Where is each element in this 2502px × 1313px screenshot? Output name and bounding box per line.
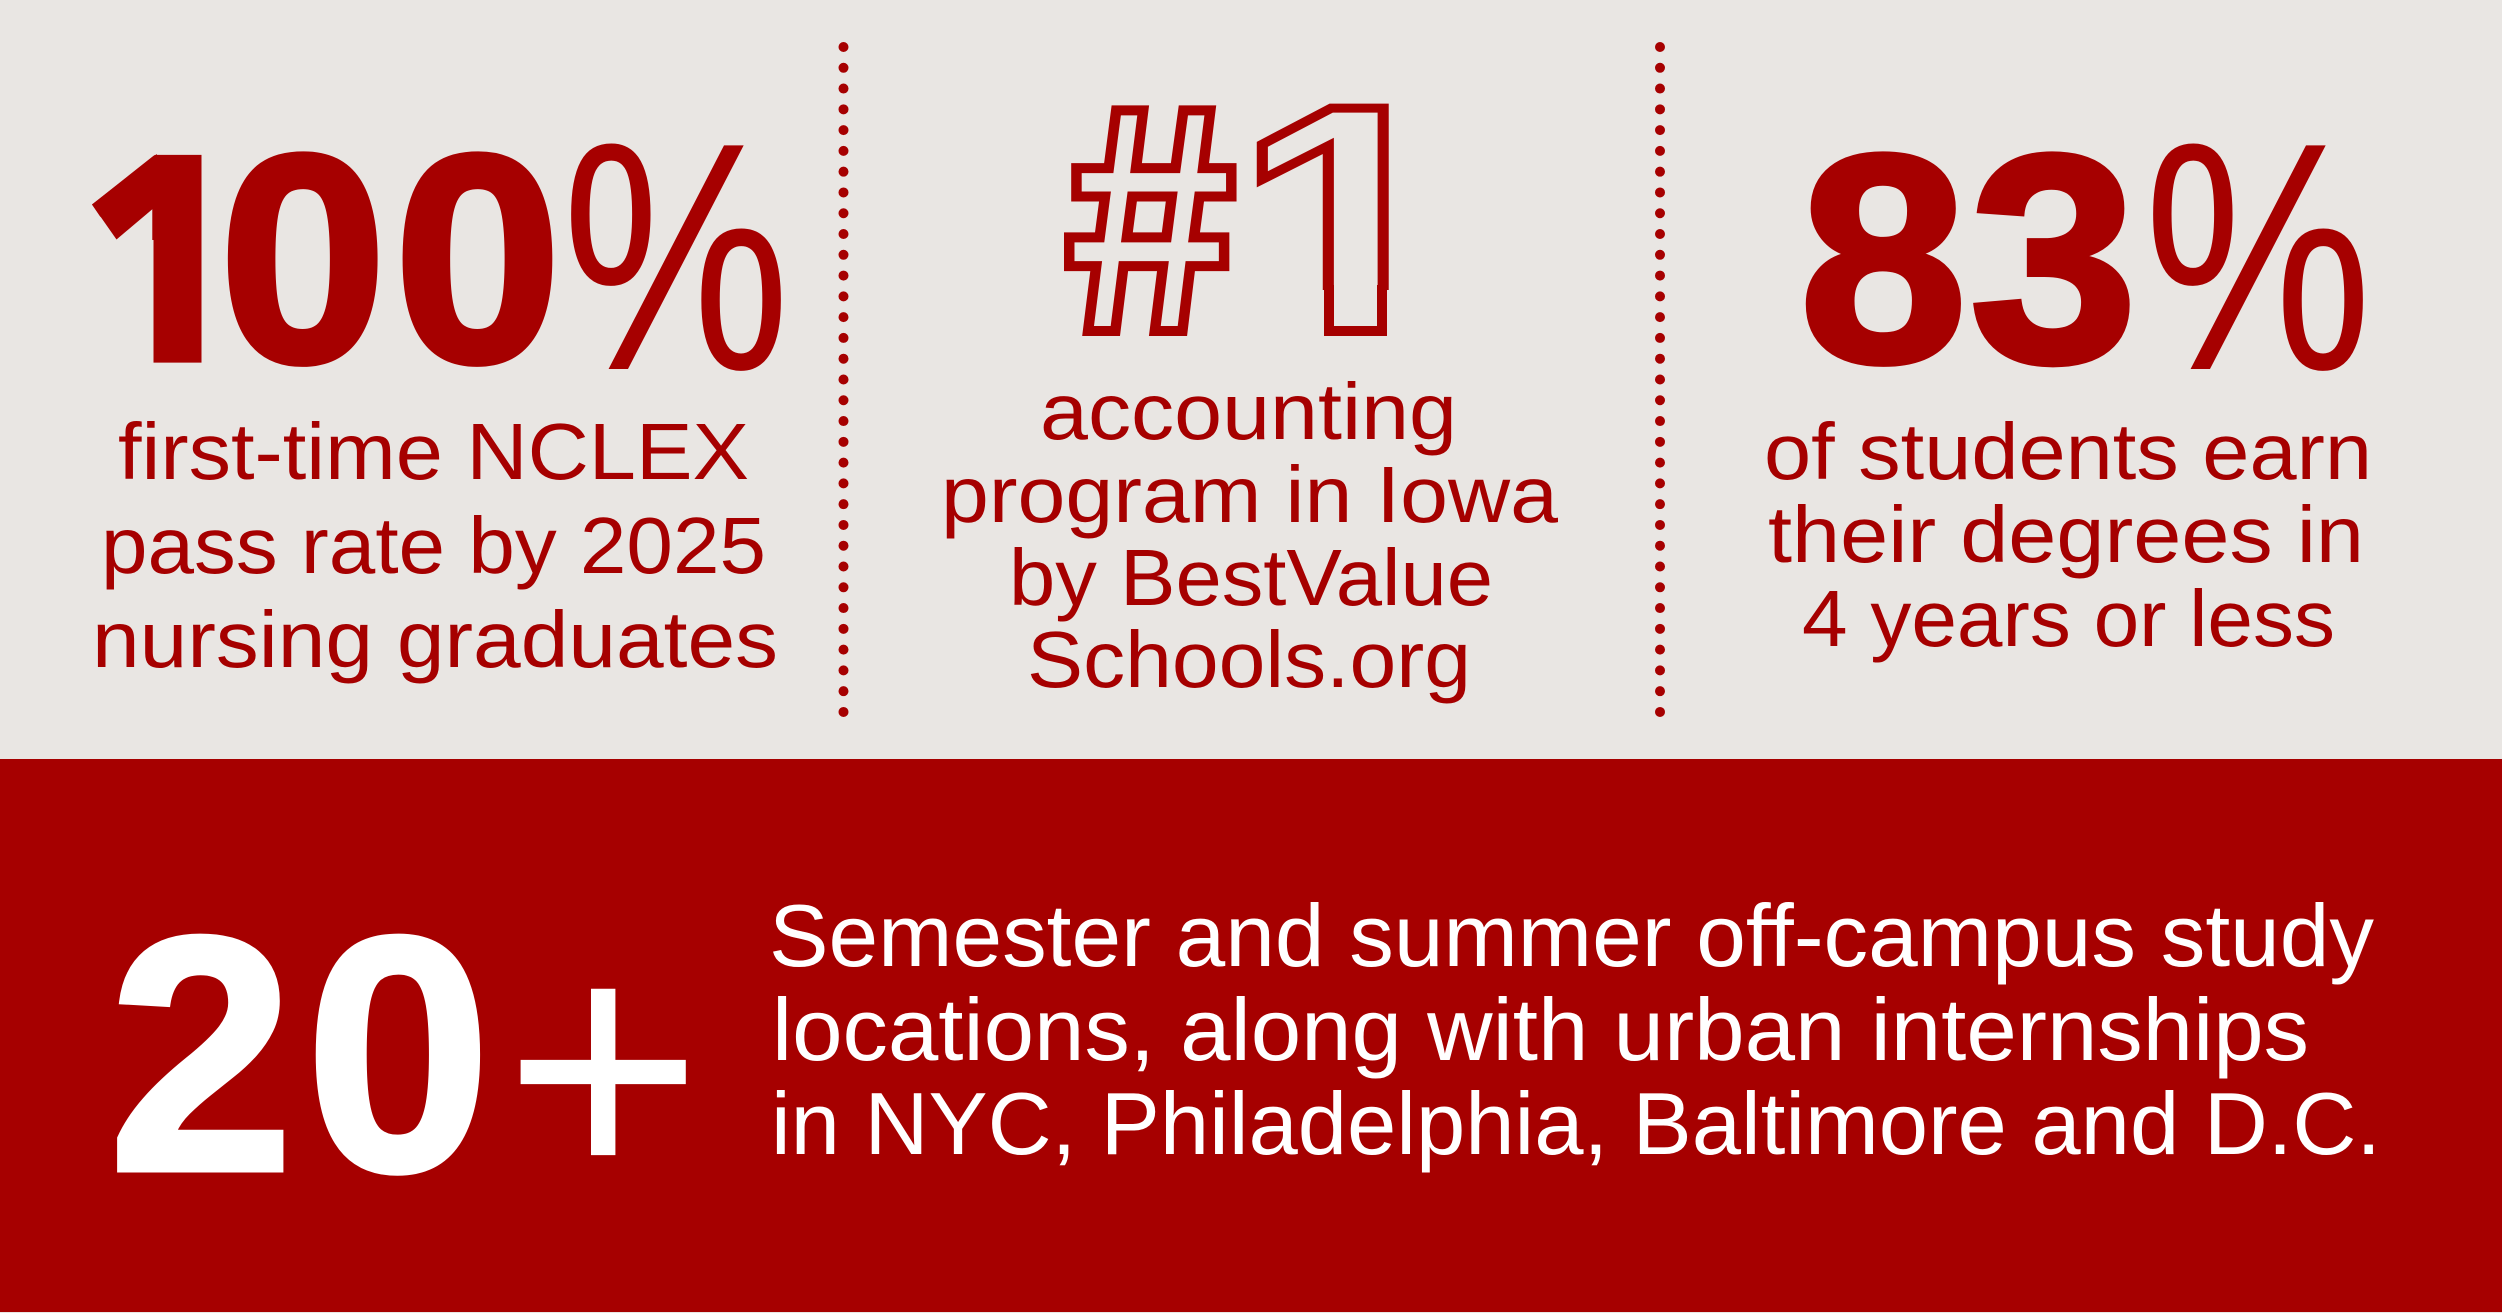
text: graduation description: their degrees in	[1768, 490, 2364, 579]
stat: #1 outlined	[1064, 104, 1389, 336]
text: off-campus description: in NYC, Philadelphia, Baltimore and D.C.	[771, 1074, 2381, 1173]
divider: right dotted line	[1655, 47, 1665, 712]
panel: NCLEX pass rate	[92, 144, 781, 684]
stat: 83%: 83	[1799, 94, 2138, 424]
text: NCLEX description: first-time NCLEX	[118, 407, 749, 496]
stat: 100%: 00	[219, 94, 562, 424]
stat: #1 outlined: 1	[1235, 39, 1457, 400]
text: off-campus description	[769, 886, 2381, 1173]
text: accounting description: accounting	[1040, 367, 1457, 456]
text: accounting description: program in Iowa	[941, 450, 1559, 539]
text: graduation description: 4 years or less	[1802, 574, 2335, 663]
text: graduation description	[1764, 407, 2372, 663]
stat: 83%	[1799, 75, 2372, 438]
text: accounting description: Schools.org	[1027, 615, 1471, 704]
divider: left dotted line	[838, 47, 848, 712]
panel: accounting ranking	[946, 104, 1558, 704]
text: off-campus description: locations, along with urban internships	[772, 980, 2309, 1079]
text: off-campus description: Semester and summer off-campus study	[769, 886, 2374, 985]
text: NCLEX description: pass rate by 2025	[101, 501, 766, 590]
panel: off-campus study band	[0, 759, 2502, 1312]
text: accounting description: by BestValue	[1009, 533, 1493, 622]
stat: 20+: 20	[108, 867, 491, 1241]
text: graduation description: of students earn	[1764, 407, 2372, 496]
stat: 100%	[92, 144, 781, 371]
stat: 100%: 1	[67, 91, 270, 427]
text: NCLEX description: nursing graduates	[92, 595, 778, 684]
panel: four-year graduation	[1764, 75, 2372, 663]
stat: 20+	[108, 867, 703, 1258]
text: accounting description	[941, 367, 1559, 704]
stat: 20+: +	[504, 878, 703, 1258]
stat: 100%: %	[562, 75, 790, 438]
text: NCLEX description	[92, 407, 778, 684]
stat: 83%: %	[2144, 75, 2372, 438]
